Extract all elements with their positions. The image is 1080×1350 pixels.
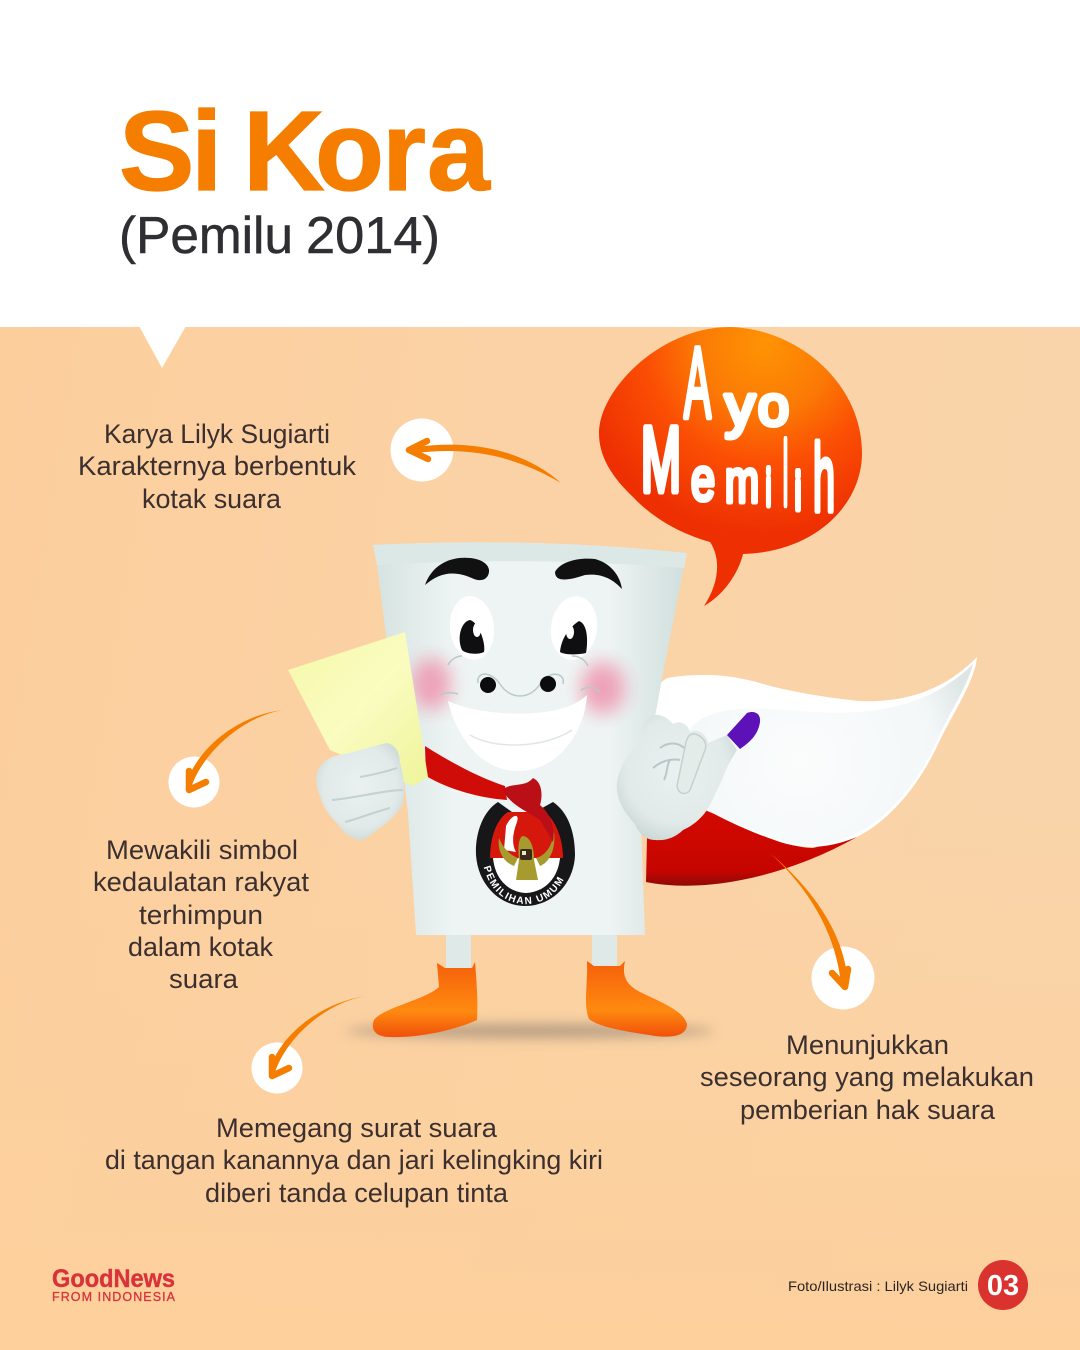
annotation: sovereignty symbol: suara (169, 964, 239, 994)
marker circle (168, 756, 220, 808)
KPU emblem (476, 778, 575, 906)
annotation: creator and shape: kotak suara (142, 484, 282, 514)
subtitle: (Pemilu (119, 207, 293, 265)
annotation: sovereignty symbol: Mewakili simbol (106, 835, 298, 865)
annotation: sovereignty symbol: kedaulatan rakyat (93, 867, 310, 897)
cheeks (411, 658, 625, 714)
arrow to sovereignty note (168, 710, 283, 808)
annotation: ballot and ink: Memegang surat suara (216, 1113, 498, 1143)
eyes (447, 593, 601, 663)
bubble text: Memilih: m (725, 448, 759, 515)
arrow to mascot credit note (390, 418, 561, 483)
white neck scarf (520, 745, 640, 790)
logo: GoodNews from Indonesia: FROM INDONESIA (52, 1290, 176, 1304)
peach background panel (0, 327, 1080, 1350)
right shoe (586, 961, 687, 1037)
bubble text: Ayo: o (758, 374, 789, 437)
marker circle (390, 418, 454, 482)
marker circle (812, 946, 874, 1010)
left hand (316, 743, 404, 840)
legs (446, 930, 617, 970)
speech bubble: Ayo Memilih: h (813, 425, 835, 532)
page number badge (978, 1260, 1028, 1310)
subtitle: 2014) (306, 207, 440, 265)
bubble text: Memilih: i (795, 463, 801, 521)
annotation: creator and shape: Karakternya berbentuk (78, 451, 357, 481)
bubble text: Memilih: e (691, 446, 715, 513)
lid band (373, 542, 687, 568)
purple ink nail (727, 712, 760, 749)
annotation: voting right: pemberian hak suara (740, 1095, 996, 1125)
scarf knot (503, 778, 554, 842)
mouth (440, 656, 600, 771)
red scarf (425, 746, 507, 800)
emblem lettering: PEMILIHAN UMUM (484, 866, 564, 904)
garuda (499, 832, 554, 880)
annotation: sovereignty symbol (93, 835, 310, 994)
page number badge: 03 (987, 1270, 1019, 1302)
title: Si Kora (119, 88, 491, 214)
right hand with inked finger (617, 712, 760, 840)
arrow to voting right note (770, 853, 874, 1010)
annotation: voting right: seseorang yang melakukan (700, 1062, 1034, 1092)
bubble text: Memilih: M (641, 409, 681, 511)
bubble text: Memilih: i (766, 460, 771, 516)
bubble text: Memilih: l (783, 425, 788, 525)
speech bubble: Ayo Memilih (599, 327, 862, 606)
annotation: voting right (700, 1030, 1034, 1125)
left shoe (373, 962, 477, 1037)
marker circle (252, 1042, 302, 1094)
annotation: ballot and ink (105, 1113, 603, 1208)
logo: GoodNews from Indonesia (52, 1265, 176, 1304)
annotation: sovereignty symbol: terhimpun (139, 900, 263, 930)
arrow to ballot note (252, 996, 366, 1094)
ballot box body (373, 542, 687, 935)
logo: GoodNews from Indonesia: GoodNews (52, 1265, 175, 1293)
annotation: sovereignty symbol: dalam kotak (128, 932, 273, 962)
annotation: ballot and ink: di tangan kanannya dan jari kelingking kiri (105, 1145, 603, 1175)
nose (478, 674, 563, 696)
cape (640, 657, 977, 886)
annotation: ballot and ink: diberi tanda celupan tinta (205, 1178, 509, 1208)
ground shadow (345, 1024, 715, 1038)
photo credit: Foto/Ilustrasi : Lilyk Sugiarti (788, 1278, 968, 1294)
bubble text: Ayo: A (684, 327, 711, 439)
bubble text: Ayo: y (725, 374, 755, 439)
eyebrows (425, 558, 622, 589)
white header notch pointer (139, 326, 186, 368)
yellow ballot paper (288, 632, 428, 786)
annotation: creator and shape (78, 419, 357, 514)
annotation: voting right: Menunjukkan (786, 1030, 949, 1060)
mascot: Si Kora ballot box character (288, 542, 977, 1045)
annotation: creator and shape: Karya Lilyk Sugiarti (104, 419, 330, 449)
